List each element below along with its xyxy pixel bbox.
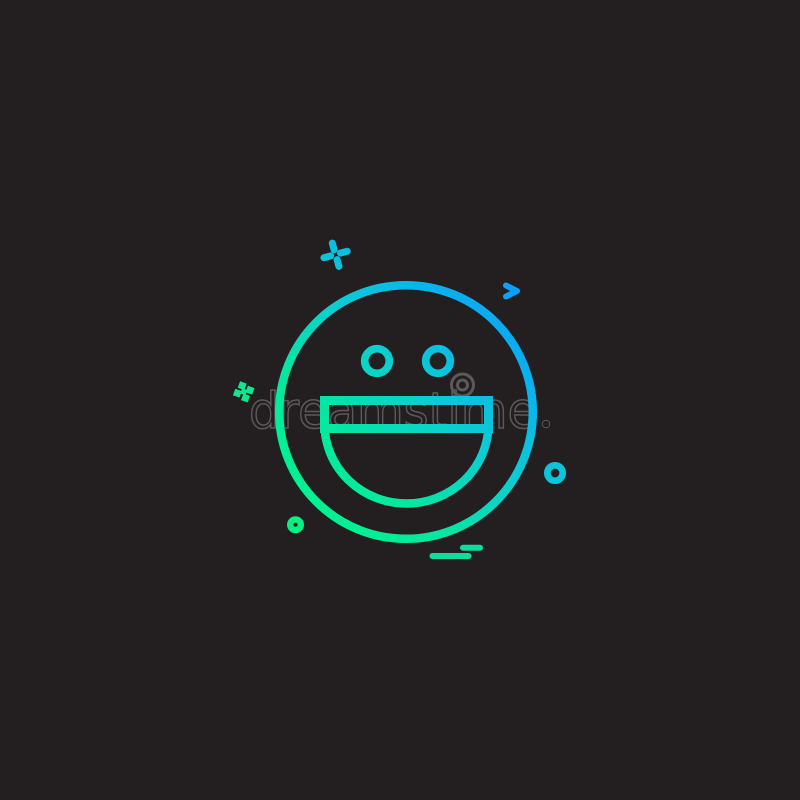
mouth lower arc	[324, 424, 488, 503]
watermark	[249, 374, 550, 440]
watermark wordmark: dreamstime	[249, 382, 537, 440]
mouth teeth bar	[324, 400, 488, 428]
icon: ring lower left	[290, 519, 301, 530]
smiley icon	[279, 285, 533, 539]
icon: four-petal star	[320, 239, 351, 271]
face outline	[279, 285, 533, 539]
icon: ring right	[547, 465, 563, 481]
left eye	[365, 349, 389, 373]
icon: checker cluster	[233, 381, 254, 402]
right eye	[426, 349, 450, 373]
icon: speed lines	[432, 548, 480, 556]
decorative icons	[233, 239, 563, 556]
watermark registered mark	[542, 420, 550, 428]
icon: chevron	[506, 286, 517, 296]
watermark spiral	[452, 374, 474, 396]
